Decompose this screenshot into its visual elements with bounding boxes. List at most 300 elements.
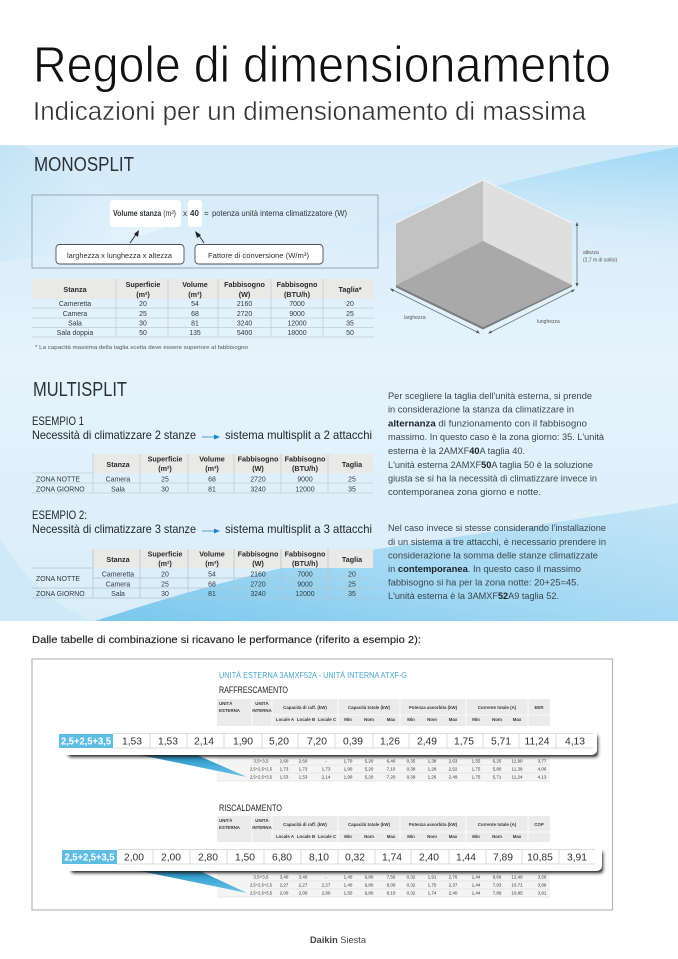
heating table rows: 3,91 xyxy=(538,890,547,896)
heating table header: Min xyxy=(472,834,480,839)
cooling table rows: 2,60 xyxy=(280,758,289,764)
table: example 2: 12000 xyxy=(295,591,315,598)
example 1 heading: Necessità di climatizzare 2 stanze xyxy=(32,429,196,442)
table: example 1: (W) xyxy=(252,464,264,473)
table: example 2: 25 xyxy=(348,582,356,588)
cooling table rows: 6,40 xyxy=(387,758,396,764)
heating highlighted row: 2,5+2,5+3,5 xyxy=(64,852,115,864)
heating table rows: - xyxy=(325,874,327,880)
heating table rows: 3,56 xyxy=(538,874,547,880)
cooling table header: UNITÀ xyxy=(219,701,233,706)
cooling table rows: 1,53 xyxy=(280,774,289,780)
heating callout wedge xyxy=(140,871,247,893)
text block: example 1 explanation: contemporanea zona giorno e notte. xyxy=(388,487,541,497)
heating table rows: 1,40 xyxy=(344,882,353,888)
cooling table rows: 2,63 xyxy=(449,758,458,764)
table: example 2: 81 xyxy=(208,591,216,598)
heating table rows: 1,44 xyxy=(472,874,481,880)
cooling highlighted row: 1,53 xyxy=(122,736,142,748)
example 2 heading: sistema multisplit a 3 attacchi xyxy=(225,523,372,536)
table: example 2: Sala xyxy=(111,591,125,598)
example 2 heading: Necessità di climatizzare 3 stanze xyxy=(32,523,196,536)
table: monosplit: 25 xyxy=(139,311,147,318)
table: example 1: 2720 xyxy=(250,476,266,484)
heating heading: RISCALDAMENTO xyxy=(219,803,282,813)
heating table header: Nom xyxy=(364,834,374,839)
cooling table rows: 1,55 xyxy=(472,758,481,764)
heating table rows: 2,5+2,5+2,5 xyxy=(250,882,272,888)
cooling table rows: 5,20 xyxy=(365,774,374,780)
heating highlighted row: 8,10 xyxy=(309,852,329,864)
table: example 2: 20 xyxy=(348,572,356,578)
heating highlighted row: 1,44 xyxy=(456,852,476,864)
heating table header: Capacità di raff. (kW) xyxy=(283,822,327,827)
heating table header: UNITÀ xyxy=(255,818,270,823)
arrow: height xyxy=(576,222,578,287)
cooling table rows: 1,75 xyxy=(472,774,481,780)
cooling table rows: 2,5+2,5+3,5 xyxy=(250,774,272,780)
cooling table rows: 1,75 xyxy=(472,766,481,772)
table: monosplit: Camera xyxy=(63,311,87,318)
cooling table header: Locale C xyxy=(318,717,337,722)
table: example 1: 3240 xyxy=(250,486,266,494)
cooling table rows: 11,24 xyxy=(512,774,523,780)
table: example 2: (m²) xyxy=(158,559,172,568)
heating table rows: 2,00 xyxy=(299,890,308,896)
illustration: room xyxy=(390,180,618,334)
cooling table rows: 0,39 xyxy=(407,774,416,780)
heating table header: INTERNA xyxy=(252,825,273,830)
heating table rows: 3,40 xyxy=(299,874,308,880)
heating table rows: 2,76 xyxy=(449,874,458,880)
table: example 2: 30 xyxy=(161,591,169,598)
arrow: factor xyxy=(195,231,204,243)
heating table rows: 3,5+3,5 xyxy=(253,874,269,880)
cooling highlighted row: 0,39 xyxy=(343,736,363,748)
table: monosplit: (W) xyxy=(239,290,251,299)
cooling highlighted row: 1,90 xyxy=(233,736,253,748)
arrow: volume xyxy=(130,230,139,243)
formula text: x xyxy=(183,209,187,218)
table: monosplit: (m²) xyxy=(136,290,150,299)
section: heating xyxy=(57,803,603,897)
text block: example 2 explanation xyxy=(388,523,606,601)
table: monosplit: Superficie xyxy=(126,280,160,289)
heating table rows: 6,80 xyxy=(365,874,374,880)
cooling table header: Corrente totale (A) xyxy=(478,705,517,710)
right wall xyxy=(483,180,572,285)
table: example 2: 20 xyxy=(161,572,169,578)
table: example 1: 30 xyxy=(161,486,169,494)
cooling table header: EER xyxy=(534,705,544,710)
table: monosplit: 12000 xyxy=(287,320,307,328)
formula text xyxy=(113,209,347,218)
cooling table header: Potenza assorbita (kW) xyxy=(409,705,458,710)
text block: example 1 explanation: esterna è la 2AMXF40A taglia 40. xyxy=(388,446,525,456)
cooling highlighted row: 5,71 xyxy=(491,736,511,748)
heating table rows: 2,40 xyxy=(449,890,458,896)
heating highlighted row: 3,91 xyxy=(567,852,587,864)
table: example 2 xyxy=(32,549,373,598)
cooling table header: Max xyxy=(387,717,396,722)
heating highlighted row: 7,89 xyxy=(493,852,513,864)
heating table rows: 2,27 xyxy=(322,882,331,888)
table: example 2: (BTU/h) xyxy=(292,559,319,568)
cooling table rows: 5,71 xyxy=(493,774,502,780)
formula text: potenza unità interna climatizzatore (W) xyxy=(212,209,347,218)
table: monosplit: 5400 xyxy=(237,330,252,337)
table: example 2: 25 xyxy=(161,582,169,588)
table: example 1: 12000 xyxy=(295,486,315,494)
table: example 1: 81 xyxy=(208,486,216,494)
intro line: performance tables: Dalle tabelle di combinazione si ricavano le performance (riferito a esempio 2): xyxy=(32,634,421,646)
section: cooling xyxy=(54,685,598,781)
table: example 2: ZONA NOTTE xyxy=(36,576,80,583)
cooling table header: Nom xyxy=(364,717,374,722)
table: example 1: (m³) xyxy=(205,464,219,473)
formula highlight: volume xyxy=(110,200,181,227)
table: example 2: Volume xyxy=(199,550,225,558)
example 1 heading: sistema multisplit a 2 attacchi xyxy=(225,429,372,442)
heading: multisplit: MULTISPLIT xyxy=(33,379,127,401)
table: monosplit: 9000 xyxy=(289,311,305,318)
heating table rows: 1,40 xyxy=(344,874,353,880)
heating highlighted row: 1,50 xyxy=(235,852,255,864)
cooling table header: Nom xyxy=(427,717,437,722)
text block: example 1 explanation: L'unità esterna 2AMXF50A taglia 50 è la soluzione xyxy=(388,460,593,470)
cooling table header: Locale A xyxy=(276,717,295,722)
cooling table header: Max xyxy=(513,717,522,722)
heating table header: UNITÀ xyxy=(219,818,233,823)
table: monosplit: 81 xyxy=(191,320,199,328)
floor edge xyxy=(396,285,572,330)
heating table header: Min xyxy=(344,834,352,839)
cooling highlighted row xyxy=(54,726,598,757)
table: monosplit: 68 xyxy=(191,311,199,318)
panel: performance tables xyxy=(32,659,612,910)
table: monosplit: (BTU/h) xyxy=(284,290,311,299)
table: example 1: Fabbisogno xyxy=(238,454,279,464)
cooling table rows: 1,53 xyxy=(299,774,308,780)
callout: dimensions xyxy=(56,244,184,264)
table: example 1: 25 xyxy=(348,476,356,484)
heating table header: Max xyxy=(513,834,522,839)
text block: example 2 explanation: di un sistema a tre attacchi, è necessario prendere in xyxy=(388,537,606,547)
table: example 2: 35 xyxy=(348,591,356,598)
table: monosplit: 54 xyxy=(191,301,199,308)
table: monosplit: Taglia* xyxy=(338,285,362,294)
example 2 heading: ESEMPIO 2: xyxy=(32,509,87,522)
heating table header: Locale B xyxy=(297,834,315,839)
table: monosplit: Stanza xyxy=(63,285,88,294)
cooling table rows: 1,73 xyxy=(299,766,308,772)
heating table rows: 1,75 xyxy=(428,882,437,888)
table: monosplit: 50 xyxy=(139,330,147,337)
table: monosplit: Volume xyxy=(182,280,208,289)
cooling table header: Locale B xyxy=(297,717,315,722)
heating table header: Nom xyxy=(427,834,437,839)
cooling table header: Capacità totale (kW) xyxy=(348,705,391,710)
table: example 1: (m²) xyxy=(158,464,172,473)
arrow xyxy=(202,434,220,440)
heating highlighted row: 0,32 xyxy=(345,852,365,864)
heating table rows: 6,80 xyxy=(365,882,374,888)
cooling table rows: 2,5+2,5+2,5 xyxy=(250,766,272,772)
cooling table rows: - xyxy=(325,758,327,764)
cooling table rows: 0,39 xyxy=(407,766,416,772)
heating highlighted row: 2,00 xyxy=(124,852,144,864)
heating table rows: 1,44 xyxy=(472,882,481,888)
heating table rows: 8,66 xyxy=(493,874,502,880)
cooling highlighted row: 5,20 xyxy=(269,736,289,748)
heating table rows: 10,85 xyxy=(511,890,523,896)
heating table header: Locale A xyxy=(276,834,295,839)
page background band xyxy=(0,145,678,621)
heating table rows: 1,74 xyxy=(428,890,437,896)
text block: example 2 explanation: Nel caso invece si stesse considerando l'installazione xyxy=(388,523,606,533)
formula text: Volume stanza (m³) xyxy=(113,209,176,218)
cooling table rows: 5,20 xyxy=(365,758,374,764)
heating highlighted row: 6,80 xyxy=(272,852,292,864)
heating table rows: 0,32 xyxy=(407,874,416,880)
cooling table header: ESTERNA xyxy=(219,708,241,713)
callout: conversion factor xyxy=(195,244,323,264)
label: height xyxy=(583,250,618,264)
table: monosplit: Sala doppia xyxy=(57,330,93,337)
formula highlight: factor xyxy=(188,200,202,227)
heating table rows: 0,32 xyxy=(407,882,416,888)
heating table rows: 6,80 xyxy=(365,890,374,896)
heating table rows: 1,44 xyxy=(472,890,481,896)
heating table header: Capacità totale (kW) xyxy=(348,822,391,827)
cooling table rows: 1,28 xyxy=(428,766,437,772)
table: example 1: 35 xyxy=(348,486,356,494)
example 1 heading xyxy=(32,415,372,442)
label: width: larghezza xyxy=(404,315,426,321)
heating table header: COP xyxy=(534,822,544,827)
table: monosplit: 20 xyxy=(346,301,354,308)
table: example 2: Superficie xyxy=(148,550,182,558)
cooling table rows: 3,77 xyxy=(538,758,547,764)
heating table header: Locale C xyxy=(318,834,337,839)
example 1 heading: ESEMPIO 1 xyxy=(32,415,84,428)
left wall xyxy=(396,180,483,285)
table: monosplit: 50 xyxy=(346,330,354,337)
table: example 2: Camera xyxy=(106,582,130,588)
cooling table rows: 1,90 xyxy=(344,766,353,772)
table: example 1: Volume xyxy=(199,454,225,464)
heating table rows: 12,48 xyxy=(511,874,523,880)
heating highlighted row: 2,00 xyxy=(161,852,181,864)
cooling heading: RAFFRESCAMENTO xyxy=(219,685,288,695)
cooling table header: Min xyxy=(407,717,415,722)
table: example 1: Fabbisogno xyxy=(285,454,326,464)
table: example 2: 54 xyxy=(208,572,216,578)
cooling table rows: 7,10 xyxy=(387,766,396,772)
table: example 2: 3240 xyxy=(250,591,266,598)
heating table rows: 3,89 xyxy=(538,882,547,888)
cooling table rows: 5,20 xyxy=(365,766,374,772)
heating table rows: 8,10 xyxy=(387,890,396,896)
heating table rows: 7,89 xyxy=(493,890,502,896)
heating table header: Max xyxy=(449,834,458,839)
table: monosplit: 2160 xyxy=(237,301,252,308)
table: example 2: 2160 xyxy=(250,572,266,578)
cooling highlighted row: 2,14 xyxy=(194,736,214,748)
cooling table rows: 2,14 xyxy=(322,774,331,780)
heating table rows: 0,32 xyxy=(407,890,416,896)
callout: conversion factor: Fattore di conversione (W/m³) xyxy=(208,251,309,260)
arrow: width xyxy=(390,288,480,334)
cooling table rows: 11,90 xyxy=(512,758,523,764)
cooling table rows: 1,90 xyxy=(344,774,353,780)
text block: example 1 explanation: massimo. In questo caso è la zona giorno: 35. L'unità xyxy=(388,432,605,442)
table: example 1: 68 xyxy=(208,476,216,484)
heating table rows: 7,93 xyxy=(493,882,502,888)
subtitle: Indicazioni per un dimensionamento di massima xyxy=(33,98,587,126)
table: example 1: Stanza xyxy=(106,460,131,469)
table: example 2: Cameretta xyxy=(102,572,134,578)
text block: example 1 explanation: Per scegliere la taglia dell'unità esterna, si prende xyxy=(388,391,592,401)
heating highlighted row: 2,40 xyxy=(419,852,439,864)
title: Regole di dimensionamento xyxy=(33,36,611,93)
text block: example 1 explanation xyxy=(388,391,605,497)
table: monosplit: 20 xyxy=(139,301,147,308)
cooling table rows: 1,38 xyxy=(428,758,437,764)
heating highlighted row xyxy=(57,842,603,873)
formula text: 40 xyxy=(190,209,199,218)
heating table rows: 2,27 xyxy=(280,882,289,888)
heating highlighted row: 10,85 xyxy=(527,852,553,864)
table: monosplit: Cameretta xyxy=(59,301,91,308)
cooling table rows: 2,60 xyxy=(299,758,308,764)
cooling highlighted row: 1,53 xyxy=(158,736,178,748)
heating table rows: 2,5+2,5+3,5 xyxy=(250,890,272,896)
cooling highlighted row: 1,26 xyxy=(380,736,400,748)
cooling highlighted row: 7,20 xyxy=(307,736,327,748)
table: example 1: Superficie xyxy=(148,454,182,464)
cooling table rows: 7,20 xyxy=(387,774,396,780)
heating table rows: 1,91 xyxy=(428,874,437,880)
cooling table header: UNITÀ xyxy=(255,701,270,706)
table: monosplit: 18000 xyxy=(287,330,307,337)
cooling table header xyxy=(217,699,550,727)
table: example 2: (W) xyxy=(252,559,264,568)
cooling table header: Capacità di raff. (kW) xyxy=(283,705,327,710)
cooling table header: Nom xyxy=(492,717,502,722)
heating table rows: 2,27 xyxy=(299,882,308,888)
heating table header: ESTERNA xyxy=(219,825,241,830)
label: height: (2,7 m di solito) xyxy=(583,258,618,264)
table: monosplit: Sala xyxy=(68,320,82,328)
table: example 1: 25 xyxy=(161,476,169,484)
cooling highlighted row: 4,13 xyxy=(565,736,585,748)
heating highlighted row: 1,74 xyxy=(382,852,402,864)
text block: example 1 explanation: in considerazione la stanza da climatizzare in xyxy=(388,404,574,414)
heating table header: Corrente totale (A) xyxy=(478,822,517,827)
heating table header: Min xyxy=(407,834,415,839)
cooling table rows: 2,49 xyxy=(449,774,458,780)
floor xyxy=(396,241,572,327)
cooling table rows: 1,70 xyxy=(344,758,353,764)
text block: example 2 explanation: fabbisogno si ha per la zona notte: 20+25=45. xyxy=(388,578,579,588)
heating table rows xyxy=(217,871,550,897)
heating table header: Max xyxy=(387,834,396,839)
cooling table rows: 2,52 xyxy=(449,766,458,772)
cooling table rows: 1,26 xyxy=(428,774,437,780)
table: monosplit: Fabbisogno xyxy=(277,280,318,289)
table: example 1: Taglia xyxy=(342,460,363,469)
table: example 2: Fabbisogno xyxy=(238,550,279,558)
footnote: * La capacità massima della taglia scelta deve essere superiore al fabbisogno xyxy=(35,345,248,351)
arrow xyxy=(202,528,220,534)
table: example 1 xyxy=(32,454,373,494)
table: monosplit: 30 xyxy=(139,320,147,328)
text block: example 1 explanation: alternanza di funzionamento con il fabbisogno xyxy=(388,418,587,428)
table: example 2: 9000 xyxy=(297,582,313,588)
heating table rows: 2,00 xyxy=(280,890,289,896)
label: height: altezza xyxy=(583,250,599,256)
cooling table header: INTERNA xyxy=(252,708,273,713)
arrow: length xyxy=(488,290,575,334)
text block: example 2 explanation: considerazione la somma delle stanze climatizzate xyxy=(388,550,598,560)
footer: Daikin Siesta xyxy=(310,935,366,945)
heating table rows: 10,71 xyxy=(511,882,523,888)
table: monosplit: 35 xyxy=(346,320,354,328)
table: example 1: Sala xyxy=(111,486,125,494)
cooling table header: Max xyxy=(449,717,458,722)
heating table rows: 2,37 xyxy=(449,882,458,888)
heating table rows: 1,50 xyxy=(344,890,353,896)
cooling highlighted row: 2,5+2,5+3,5 xyxy=(61,736,111,748)
heating table header: Potenza assorbita (kW) xyxy=(409,822,458,827)
cooling table header: Min xyxy=(344,717,352,722)
text block: example 1 explanation: giusta se si ha la necessità di climatizzare invece in xyxy=(388,474,597,484)
table: monosplit: 135 xyxy=(189,330,201,337)
table: example 1: (BTU/h) xyxy=(292,464,319,473)
table: example 2: Stanza xyxy=(106,555,131,564)
table: example 2: Taglia xyxy=(342,555,363,564)
table: example 2: Fabbisogno xyxy=(285,550,326,558)
example 2 heading xyxy=(32,509,372,536)
cooling callout wedge xyxy=(140,755,247,777)
callout: dimensions: larghezza x lunghezza x altezza xyxy=(67,251,173,260)
cooling table rows: 11,39 xyxy=(512,766,523,772)
table: monosplit xyxy=(32,279,374,337)
table: example 1: ZONA NOTTE xyxy=(36,476,80,484)
table: monosplit: 2720 xyxy=(237,311,252,318)
cooling table rows: 5,80 xyxy=(493,766,502,772)
table: example 1: 9000 xyxy=(297,476,313,484)
cooling table rows: 4,06 xyxy=(538,766,547,772)
heating table rows: 2,80 xyxy=(322,890,331,896)
table: example 1: Camera xyxy=(106,476,130,484)
heating table rows: 3,40 xyxy=(280,874,289,880)
heating highlighted row: 2,80 xyxy=(198,852,218,864)
heating table rows: 7,50 xyxy=(387,874,396,880)
cooling table rows: 4,13 xyxy=(538,774,547,780)
cooling highlighted row: 2,49 xyxy=(417,736,437,748)
cooling highlighted row: 1,75 xyxy=(454,736,474,748)
cooling table rows: 1,73 xyxy=(280,766,289,772)
table: monosplit: 25 xyxy=(346,311,354,318)
heading: monosplit: MONOSPLIT xyxy=(34,154,134,176)
label: length: lunghezza xyxy=(537,319,560,325)
text block: example 2 explanation: L'unità esterna è la 3AMXF52A9 taglia 52. xyxy=(388,591,559,601)
panel heading: UNITÀ ESTERNA 3AMXF52A - UNITÀ INTERNA ATXF-G xyxy=(219,670,407,680)
cooling table header: Min xyxy=(472,717,480,722)
table: monosplit: Fabbisogno xyxy=(224,280,265,289)
